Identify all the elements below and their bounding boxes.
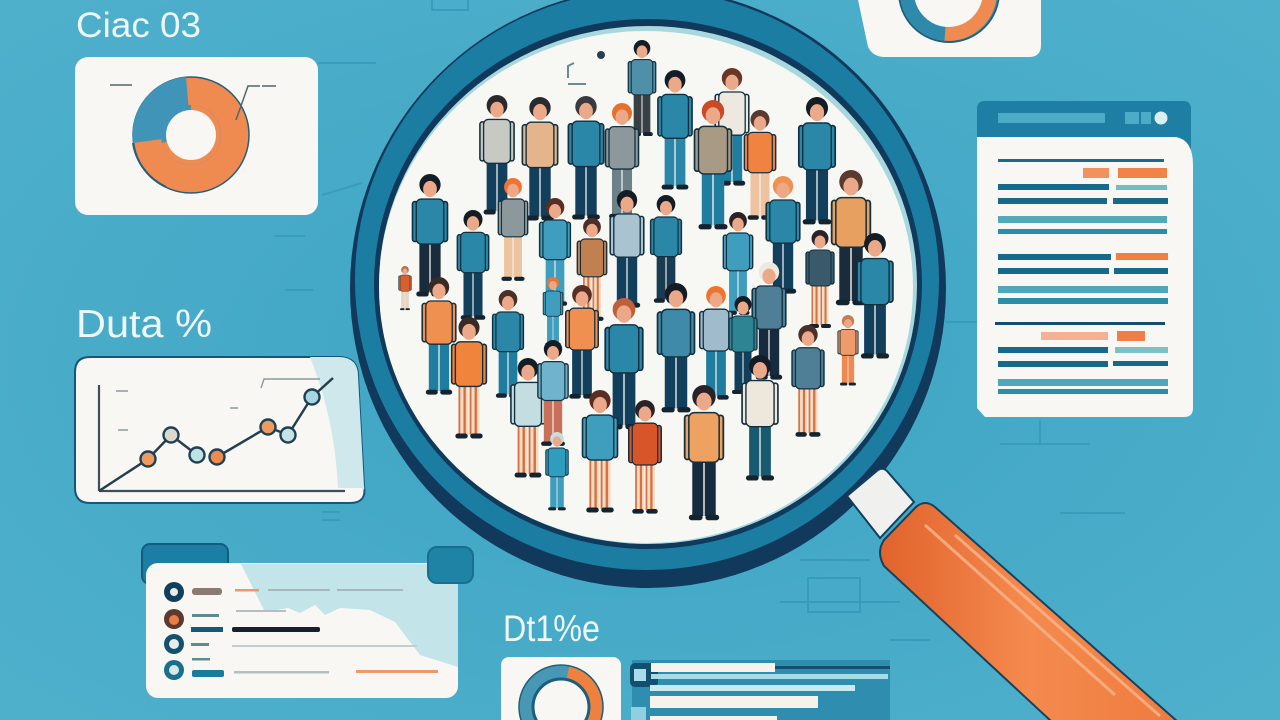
person	[723, 212, 753, 315]
chart axes	[99, 385, 345, 491]
person	[493, 290, 523, 398]
person	[422, 277, 456, 395]
ferrule	[847, 469, 914, 538]
panel: line chart card	[75, 357, 364, 503]
person	[695, 100, 731, 229]
bottom-centre heading: Dt1%e	[503, 608, 600, 649]
person	[651, 195, 681, 303]
floating dots	[597, 51, 605, 59]
top-right partial donut card	[857, 0, 1041, 57]
person	[568, 96, 604, 219]
top-left heading: Ciac 03	[76, 6, 201, 45]
person	[566, 285, 598, 399]
chart points	[140, 390, 320, 466]
chart line	[99, 378, 333, 491]
person	[610, 190, 644, 308]
faint background details	[275, 0, 1125, 640]
icons list	[164, 582, 184, 680]
person	[658, 70, 692, 190]
person	[838, 315, 858, 386]
person	[538, 340, 568, 446]
panel: right document	[977, 101, 1193, 417]
panel: bottom-left table card	[142, 544, 473, 698]
person	[522, 97, 558, 220]
orange grip	[880, 503, 1178, 720]
person	[766, 176, 800, 294]
person	[752, 262, 786, 380]
person	[715, 68, 749, 186]
floating glyphs	[568, 63, 586, 84]
person	[806, 230, 834, 328]
middle-left heading: Duta %	[76, 303, 212, 346]
person	[742, 355, 778, 480]
person	[546, 432, 568, 510]
chart annotations	[116, 379, 320, 430]
grip highlight	[925, 525, 1160, 716]
bars	[191, 588, 438, 677]
person	[511, 358, 545, 478]
person	[480, 95, 514, 215]
person	[857, 233, 893, 358]
mountain shade	[241, 564, 458, 667]
person	[685, 385, 723, 520]
person	[399, 266, 411, 310]
right tab	[428, 547, 473, 583]
person	[658, 283, 694, 412]
person	[605, 103, 639, 219]
person	[582, 390, 618, 512]
donut chart	[132, 77, 249, 193]
panel: donut card top left	[75, 57, 318, 215]
person	[540, 198, 570, 306]
person	[452, 317, 486, 439]
person	[744, 110, 776, 220]
person	[457, 210, 489, 320]
panel: bottom-centre card	[501, 657, 621, 720]
person	[412, 174, 448, 296]
document header	[977, 101, 1191, 150]
donut chart	[519, 665, 603, 720]
person	[629, 400, 661, 514]
person	[543, 277, 563, 346]
person	[799, 97, 835, 224]
person	[498, 178, 528, 281]
person	[605, 298, 643, 429]
magnifier handle	[847, 469, 1178, 720]
person	[832, 170, 870, 305]
magnifier lens	[350, 0, 946, 588]
document body	[977, 137, 1193, 417]
panel: bottom-centre bars	[630, 660, 890, 720]
person	[729, 296, 757, 394]
person	[628, 40, 656, 136]
person	[577, 218, 607, 321]
leader lines	[110, 85, 276, 120]
person	[700, 286, 732, 400]
document rows	[995, 159, 1168, 394]
person	[792, 325, 824, 437]
left tab	[142, 544, 228, 584]
crowd of people	[399, 40, 893, 520]
